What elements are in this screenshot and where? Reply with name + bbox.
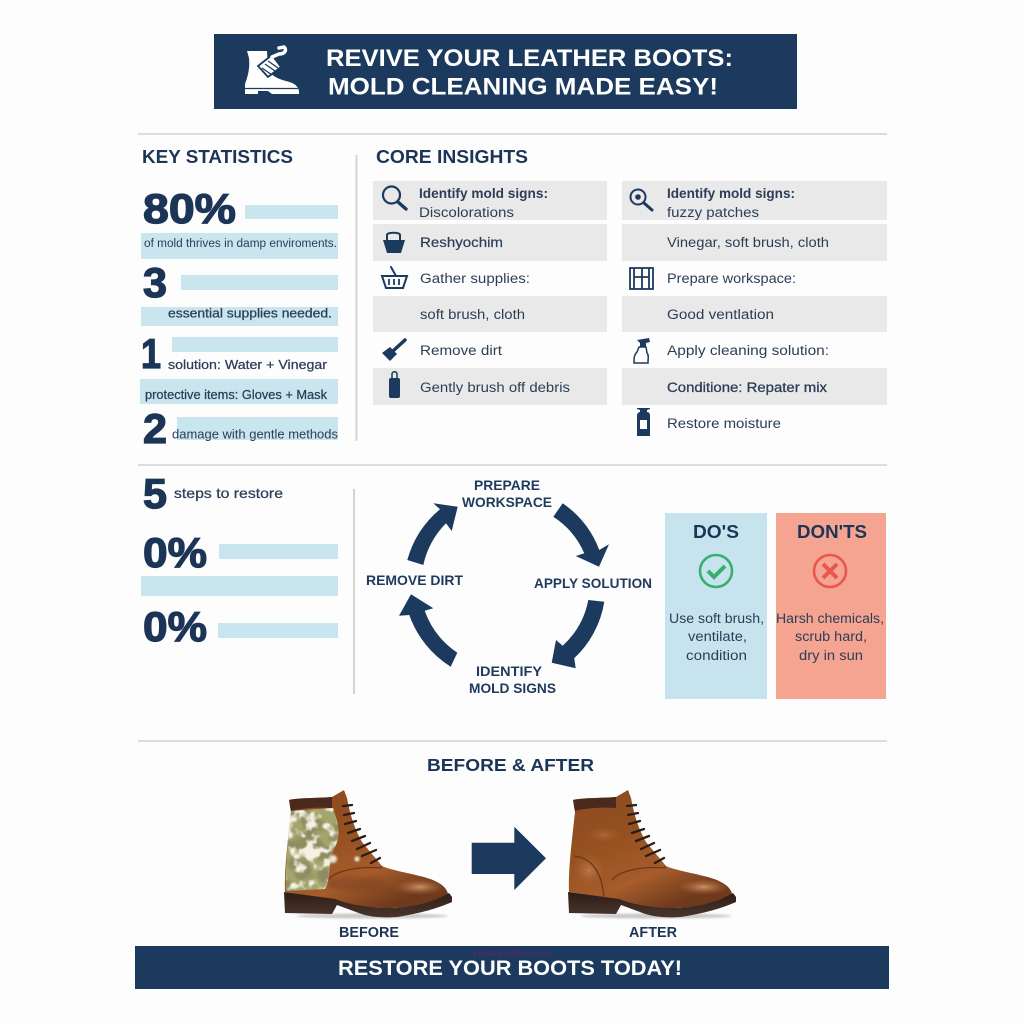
- stat: 80%: [141, 185, 338, 259]
- icon: basket: [382, 267, 407, 288]
- step label: apply solution: APPLY SOLUTION: [534, 575, 652, 591]
- icon: conditioner bottle: [637, 408, 650, 436]
- right insights column: Identify mold signs:: [667, 186, 795, 201]
- header banner: [214, 34, 797, 109]
- stat: 5 steps: 5: [143, 470, 167, 517]
- step label: prepare workspace: [462, 477, 552, 510]
- arrow: workspace to solution: [553, 503, 609, 567]
- arrow: solution to identify: [552, 600, 604, 668]
- icon: check: [700, 555, 732, 587]
- title: [326, 45, 733, 100]
- right insights column: Prepare workspace:: [667, 271, 796, 286]
- stat: 2 damage: damage with gentle methods: [172, 426, 338, 442]
- label: after: AFTER: [629, 925, 678, 941]
- arrow: identify to remove: [399, 594, 457, 667]
- step label: prepare workspace: PREPARE: [474, 477, 540, 493]
- footer banner: RESTORE YOUR BOOTS TODAY!: [338, 957, 682, 980]
- icon: boot with brush: [245, 47, 299, 94]
- icon: bottle: [389, 372, 400, 398]
- section: before and after: [283, 755, 736, 941]
- footer banner: [135, 946, 889, 989]
- left insights column: soft brush, cloth: [420, 307, 525, 322]
- stat: 3 supplies: essential supplies needed.: [168, 306, 332, 320]
- right insights column: Restore moisture: [667, 416, 781, 431]
- icon: magnifier: [383, 186, 406, 209]
- image: restored boot: [568, 790, 736, 918]
- icon: cross: [814, 555, 846, 587]
- stat: first 0%: 0%: [143, 529, 207, 576]
- step label: identify mold signs: IDENTIFY: [476, 663, 543, 679]
- arrow: remove to prepare: [407, 503, 458, 565]
- step label: remove dirt: REMOVE DIRT: [366, 572, 463, 588]
- step label: identify mold signs: MOLD SIGNS: [469, 680, 556, 696]
- arrow: before to after: [472, 827, 546, 890]
- panel: do's: condition: [686, 648, 747, 663]
- panel: do's: DO'S: [693, 522, 739, 542]
- heading: key statistics: KEY STATISTICS: [142, 146, 293, 167]
- right insights column: [622, 181, 887, 436]
- panel: do's: ventilate,: [688, 629, 747, 644]
- stat: 1 solution: 1: [141, 330, 161, 377]
- step label: prepare workspace: WORKSPACE: [462, 494, 552, 510]
- stat: 5 steps: [143, 470, 283, 517]
- left insights column: Identify mold signs:: [419, 186, 548, 201]
- left insights column: [373, 181, 607, 405]
- icon: paint brush: [382, 340, 405, 361]
- footer banner: clearingbin.com: [473, 948, 550, 959]
- right insights column: fuzzy patches: [667, 205, 759, 220]
- right insights column: Apply cleaning solution:: [667, 343, 829, 358]
- stat: second 0%: [143, 603, 338, 650]
- panel: do's: [665, 513, 767, 699]
- stat: 80%: 80%: [143, 185, 236, 232]
- left insights column: Discolorations: [419, 205, 514, 220]
- title: MOLD CLEANING MADE EASY!: [328, 74, 718, 100]
- panel: don'ts: dry in sun: [799, 648, 863, 663]
- left insights column: Gather supplies:: [420, 271, 530, 286]
- panel: don'ts: scrub hard,: [795, 629, 867, 644]
- stat: 5 steps: steps to restore: [174, 485, 283, 501]
- stat: second 0%: 0%: [143, 603, 207, 650]
- stat: 3 supplies: 3: [143, 259, 167, 306]
- stat: first 0%: [141, 529, 338, 596]
- panel: do's: Use soft brush,: [669, 611, 764, 626]
- mold patch: [286, 808, 338, 891]
- panel: don'ts: [776, 513, 886, 699]
- icon: spray bottle: [634, 338, 650, 363]
- image: moldy boot: [283, 790, 452, 918]
- left insights column: Reshyochim: [420, 235, 503, 250]
- stat: protective items: protective items: Gloves + Mask: [145, 387, 327, 402]
- right insights column: Good ventlation: [667, 307, 774, 322]
- right insights column: Conditione: Repater mix: [667, 380, 827, 395]
- heading: before and after: BEFORE & AFTER: [427, 755, 594, 775]
- cycle diagram: [366, 477, 652, 696]
- stat: protective items: [140, 379, 338, 404]
- panel: lower statistics: [141, 470, 338, 650]
- stat: 3 supplies: [141, 259, 338, 326]
- left insights column: Gently brush off debris: [420, 380, 570, 395]
- stat: 80%: of mold thrives in damp enviroments.: [144, 238, 337, 250]
- icon: magnifier with spot: [630, 190, 652, 210]
- panel: don'ts: Harsh chemicals,: [776, 611, 884, 626]
- title: REVIVE YOUR LEATHER BOOTS:: [326, 45, 733, 72]
- right insights column: Vinegar, soft brush, cloth: [667, 235, 829, 250]
- panel: key statistics: [140, 146, 338, 452]
- heading: core insights: CORE INSIGHTS: [376, 146, 528, 167]
- stat: 2 damage: 2: [143, 405, 167, 452]
- panel: core insights: [373, 146, 887, 436]
- icon: bag: [383, 233, 405, 253]
- step label: identify mold signs: [469, 663, 556, 696]
- icon: window: [630, 268, 653, 289]
- stat: 2 damage: [143, 405, 338, 452]
- stat: 1 solution: solution: Water + Vinegar: [168, 357, 328, 372]
- label: before: BEFORE: [339, 925, 399, 941]
- stat: 1 solution: [141, 330, 338, 377]
- panel: don'ts: DON'TS: [797, 522, 867, 542]
- left insights column: Remove dirt: [420, 343, 502, 358]
